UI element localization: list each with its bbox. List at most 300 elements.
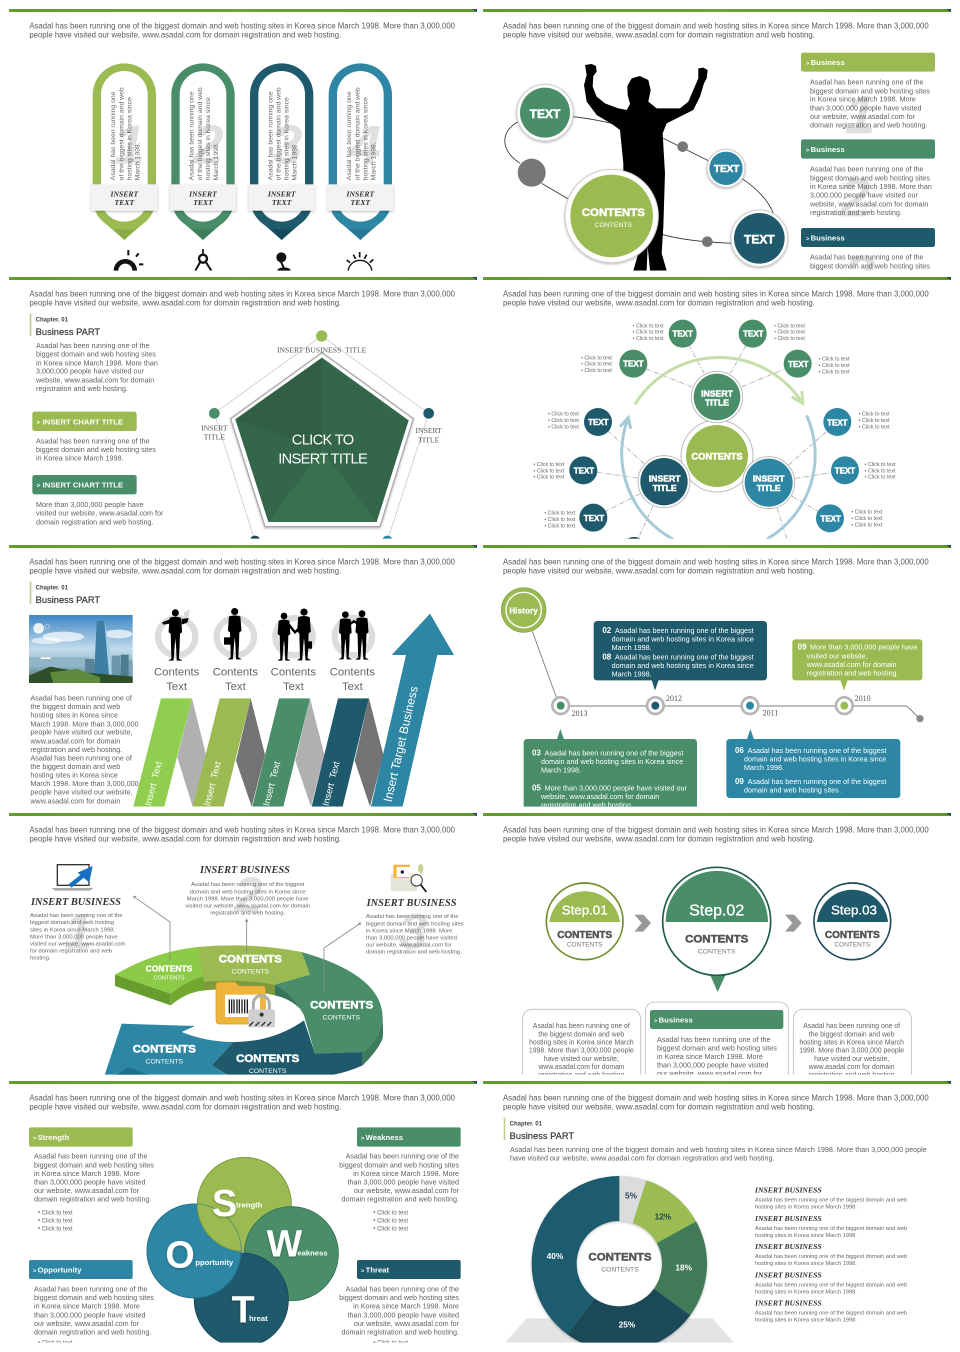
segment: green: CONTENTS	[310, 999, 374, 1011]
pill 4: March 1998.	[370, 142, 377, 180]
intro text: people have visited our website, www.asadal.com for domain registration and web hosting.	[503, 299, 815, 308]
bullet lists: • Click to text	[774, 323, 805, 329]
big arrow	[371, 614, 454, 807]
chart title bar 2: INSERT CHART TITLE	[43, 481, 123, 490]
pill 3: March 1998.	[292, 142, 299, 180]
callout 2011: March 1998.	[744, 763, 784, 772]
icon: laptop with arrow	[52, 865, 93, 891]
node labels: TEXT	[623, 360, 644, 369]
card left: www.asadal.com for domain	[537, 1064, 624, 1071]
card right: have visited our website,	[814, 1056, 889, 1063]
intro text: Asadal has been running one of the biggest domain and web hosting sites in Korea since March 1998. More than 3,000,000	[29, 1093, 456, 1102]
step 3: Step.03	[831, 902, 877, 917]
pill 4	[327, 63, 393, 240]
segment: lime: CONTENTS	[232, 969, 270, 976]
hub: insert title dark: TITLE	[653, 483, 677, 493]
body text: website, www.asadal.com for domain	[35, 375, 154, 384]
intro text: Asadal has been running one of the biggest domain and web hosting sites in Korea since March 1998. More than 3,000,000	[503, 557, 929, 566]
side block 2: 2	[839, 167, 871, 229]
callout 2013: March 1998.	[541, 766, 581, 775]
callout 2012: Asadal has been running one of the biggest	[615, 626, 754, 635]
block: threat: in Korea since March 1998. More	[353, 1302, 459, 1311]
legend 4: hosting sites in Korea since March 1998.	[755, 1290, 857, 1296]
body: left: Asadal has been running one of the	[30, 913, 123, 919]
node labels: INSERT	[415, 426, 442, 435]
bullet lists: • Click to text	[581, 362, 612, 368]
card left: hosting sites in Korea since March	[529, 1040, 634, 1047]
donut labels: 12%	[655, 1211, 672, 1221]
card right: the biggest domain and web	[809, 1031, 895, 1038]
chevron 1	[634, 915, 651, 932]
body text: biggest domain and web hosting sites	[36, 445, 156, 454]
body text: hosting sites in Korea since	[30, 711, 118, 720]
bullet lists: • Click to text	[774, 336, 805, 342]
bullet lists: • Click to text	[774, 330, 805, 336]
callout 2012: March 1998.	[612, 643, 652, 652]
block: opportunity: domain registration and web hosting.	[34, 1328, 151, 1337]
pentagon	[231, 353, 413, 527]
pill 2: INSERT	[188, 189, 217, 198]
intro text: people have visited our website, www.asadal.com for domain registration and web hosting.	[503, 835, 815, 844]
side block 2: in Korea since March 1998. More than	[810, 182, 932, 191]
body text: visited our website, www.asadal.com for	[36, 509, 164, 518]
body: centre: visited our website, www.asadal.com for domain	[185, 904, 310, 910]
segment: lime bright	[115, 947, 204, 994]
donut labels: 5%	[625, 1190, 638, 1200]
pill 4: INSERT	[345, 189, 374, 198]
block: strength: Asadal has been running one of the	[34, 1152, 147, 1161]
bullet lists: • Click to text	[851, 522, 883, 528]
pill 1: INSERT	[109, 189, 138, 198]
block: weakness: our website, www.asadal.com for	[354, 1186, 460, 1195]
circle: text blue	[707, 149, 745, 187]
card middle: our website, www.asadal.com for	[657, 1069, 763, 1078]
hub: contents: CONTENTS	[691, 452, 743, 462]
pill 2: March 1998.	[213, 142, 220, 180]
block: opportunity: in Korea since March 1998. More	[34, 1302, 140, 1311]
intro text: people have visited our website, www.asadal.com for domain registration and web hosting.	[503, 567, 815, 576]
block: weakness	[339, 1127, 461, 1233]
block: weakness: than 3,000,000 people have visited	[347, 1177, 459, 1186]
callout 2011	[726, 729, 900, 798]
nodes	[209, 330, 434, 546]
pill 1	[91, 63, 157, 240]
circle: contents: CONTENTS	[595, 222, 633, 229]
callout 2010	[792, 639, 922, 691]
card middle: Asadal has been running one of the	[657, 1035, 770, 1044]
block: strength: • Click to text	[38, 1211, 73, 1217]
callout 2010: More than 3,000,000 people have	[810, 643, 917, 652]
icon: folder with padlock	[216, 982, 275, 1027]
body: centre: March 1998. More than 3,000,000 people have	[187, 896, 309, 902]
block: opportunity: than 3,000,000 people have visited	[34, 1310, 145, 1319]
bullet lists: • Click to text	[544, 523, 576, 529]
callout 2011: 09	[735, 777, 744, 786]
side block 1: Asadal has been running one of the	[810, 78, 923, 87]
connector lines	[505, 117, 774, 243]
panel: pentagon	[9, 277, 477, 546]
bullet lists: • Click to text	[548, 412, 579, 418]
callout 2010: www.asadal.com for domain	[806, 660, 897, 669]
body text: in Korea since March 1998. More than	[36, 358, 158, 367]
legend 2	[754, 1214, 907, 1239]
block: weakness: • Click to text	[373, 1211, 408, 1217]
circle: contents	[565, 169, 658, 263]
body text: have visited our website, www.asadal.com for domain registration and web hosting.	[510, 1154, 774, 1163]
block: strength: >	[33, 1136, 37, 1142]
intro text: Asadal has been running one of the biggest domain and web hosting sites in Korea since March 1998. More than 3,000,000	[503, 289, 929, 298]
ghost numbers	[64, 867, 427, 960]
card left: Asadal has been running one of	[533, 1023, 630, 1030]
callout 2012: domain and web hosting sites in Korea since	[612, 635, 754, 644]
grey node	[518, 141, 713, 247]
ribbon 3	[252, 698, 310, 807]
pill 2: TEXT	[193, 198, 213, 207]
leader arrows	[133, 896, 361, 992]
body text: More than 3,000,000 people have	[36, 500, 143, 509]
pill 3: INSERT	[267, 189, 296, 198]
bullet lists: • Click to text	[851, 510, 883, 516]
bullet lists: • Click to text	[865, 475, 896, 481]
intro text: people have visited our website, www.asadal.com for domain registration and web hosting.	[29, 1103, 341, 1112]
side block 1: our website, www.asadal.com for	[810, 112, 916, 121]
card left: have visited our website,	[544, 1056, 619, 1063]
marker 2010: 2010	[855, 694, 871, 703]
block: opportunity: >	[33, 1269, 37, 1275]
SWOT label W	[267, 1223, 328, 1265]
side block 3: >	[806, 236, 810, 242]
body: centre: Asadal has been running one of the biggest	[191, 882, 305, 888]
donut centre	[588, 1251, 652, 1274]
block: weakness: Weakness	[366, 1133, 403, 1142]
side block 2: 3,000,000 people have visited our	[810, 191, 918, 200]
legend 5: INSERT BUSINESS	[754, 1298, 822, 1307]
legend 2: Asadal has been running one of the biggest domain and web	[755, 1226, 907, 1232]
marker 2013	[552, 697, 588, 718]
pill 1: of the biggest domain and web	[118, 87, 125, 180]
legend 1	[754, 1186, 907, 1211]
outer guide polygon	[214, 336, 429, 541]
pill 4: hosting sites in Korea since	[362, 97, 369, 180]
callout 2012: March 1998.	[612, 670, 652, 679]
pill 1: Asadal has been running one	[110, 91, 117, 180]
connectors	[583, 334, 845, 553]
top rule	[9, 813, 477, 816]
block: weakness: biggest domain and web hosting sites	[339, 1160, 459, 1169]
circle: text dark: TEXT	[744, 232, 775, 246]
panel: business people ribbons	[9, 545, 477, 807]
SWOT label W: W	[267, 1223, 303, 1265]
pill 3: TEXT	[272, 198, 292, 207]
people captions: Contents	[213, 667, 258, 679]
circle: contents: CONTENTS	[582, 207, 645, 219]
bullet lists: • Click to text	[544, 511, 576, 517]
bullet lists: • Click to text	[851, 516, 883, 522]
ribbon 1: Insert Text	[143, 760, 164, 807]
chapter heading	[30, 582, 100, 605]
block: strength: • Click to text	[38, 1219, 73, 1225]
marker 2010	[836, 694, 871, 714]
callout 2012: Asadal has been running one of the biggest	[615, 652, 754, 661]
card middle: >	[654, 1018, 658, 1024]
node labels: TEXT	[588, 418, 609, 427]
pill 1: 1	[114, 113, 145, 175]
chapter heading: Chapter. 01	[36, 318, 69, 324]
card right	[793, 1009, 911, 1096]
ribbon 4: Insert Text	[321, 760, 342, 807]
block: threat	[339, 1260, 461, 1347]
step 3: CONTENTS	[825, 930, 880, 941]
hub: insert title green: TITLE	[705, 398, 729, 408]
side block 2: website, www.asadal.com for domain	[809, 199, 928, 208]
body text: registration and web hosting.	[30, 745, 122, 754]
marker 2012	[647, 694, 682, 714]
legend 3: Asadal has been running one of the biggest domain and web	[755, 1254, 907, 1260]
body: left: visited our website, www.asadal.com	[30, 941, 126, 947]
top rule	[9, 545, 477, 548]
bullet lists: • Click to text	[533, 462, 565, 468]
callout 2013: Asadal has been running one of the biggest	[545, 748, 683, 757]
step 2: CONTENTS	[698, 948, 736, 955]
nodes: blue	[816, 408, 859, 532]
hub: insert title blue: INSERT	[753, 474, 785, 484]
people captions: Contents	[271, 667, 316, 679]
pill 2: hosting sites in Korea since	[205, 97, 212, 180]
body text: March 1998. More than 3,000,000	[30, 719, 139, 728]
card left: registration and web hosting	[538, 1072, 624, 1079]
side block 2: biggest domain and web hosting sites	[810, 173, 930, 182]
segment: blue arrow	[104, 1024, 233, 1077]
bullet lists: • Click to text	[819, 363, 850, 369]
card right: www.asadal.com for domain	[808, 1064, 895, 1071]
panel: SWOT	[9, 1081, 477, 1347]
block: opportunity	[29, 1260, 154, 1347]
hub: insert title blue	[743, 457, 795, 509]
pill 3: of the biggest domain and web	[276, 87, 283, 180]
bullet lists: • Click to text	[633, 330, 664, 336]
top rule	[9, 9, 477, 12]
side block 2: registration and web hosting.	[810, 208, 902, 217]
pill 4: 4	[349, 113, 381, 175]
icon: sunrise	[346, 252, 374, 271]
chapter heading	[30, 314, 100, 337]
node labels: TEXT	[743, 330, 764, 339]
circle: text dark	[731, 210, 788, 267]
callout 2013: 05	[532, 783, 541, 792]
people 4 with ring	[335, 610, 372, 660]
body text: hosting sites in Korea since	[30, 771, 118, 780]
block: opportunity: our website, www.asadal.com for	[34, 1319, 140, 1328]
block: opportunity: biggest domain and web hosting sites	[34, 1293, 154, 1302]
donut labels: 40%	[547, 1251, 564, 1261]
SWOT label S: trength	[236, 1201, 263, 1210]
card left: 1998. More than 3,000,000 people	[529, 1048, 634, 1055]
body text: Asadal has been running one of the biggest domain and web hosting sites in Korea since March 1998. More than 3,000,000 people	[510, 1145, 927, 1154]
silhouette of man	[584, 64, 708, 271]
intro text: people have visited our website, www.asadal.com for domain registration and web hosting.	[503, 1103, 815, 1112]
intro text: people have visited our website, www.asadal.com for domain registration and web hosting.	[29, 567, 341, 576]
people captions: Text	[283, 681, 305, 693]
intro text: people have visited our website, www.asadal.com for domain registration and web hosting.	[503, 31, 815, 40]
callout 2012: domain and web hosting sites in Korea since	[612, 661, 754, 670]
legend 2: INSERT BUSINESS	[754, 1214, 822, 1223]
bullet lists: • Click to text	[865, 462, 896, 468]
card middle: in Korea since March 1998. More	[657, 1052, 763, 1061]
icon: joystick	[276, 252, 291, 274]
chart title bar 2	[32, 475, 137, 494]
donut	[532, 1176, 707, 1351]
chapter heading	[504, 1118, 574, 1141]
node labels: TITLE	[418, 435, 440, 444]
intro text: people have visited our website, www.asadal.com for domain registration and web hosting.	[29, 299, 341, 308]
top rule	[9, 277, 477, 280]
body: right: domain registration and web hosting.	[366, 949, 462, 955]
pill 3: hosting sites in Korea since	[284, 97, 291, 180]
card middle: Business	[659, 1015, 693, 1024]
bullet lists: • Click to text	[859, 412, 890, 418]
segment: lime	[197, 945, 310, 985]
legend 5: hosting sites in Korea since March 1998.	[755, 1317, 857, 1323]
marker 2013: 2013	[572, 709, 588, 718]
timeline	[561, 703, 907, 708]
intro text: Asadal has been running one of the biggest domain and web hosting sites in Korea since March 1998. More than 3,000,000	[29, 557, 456, 566]
people captions: Contents	[330, 667, 375, 679]
ghost numbers: 3	[399, 904, 427, 960]
body: right: in Korea since March 1998. More	[366, 928, 452, 934]
bullet lists: • Click to text	[533, 468, 565, 474]
block: opportunity: • Click to text	[38, 1341, 73, 1347]
hub: insert title green: INSERT	[701, 388, 734, 398]
side block 1	[801, 52, 935, 134]
bullet lists: • Click to text	[548, 424, 579, 430]
marker 2011: 2011	[763, 709, 778, 718]
bullet lists: • Click to text	[548, 418, 579, 424]
block: weakness: >	[361, 1136, 365, 1142]
body text: Asadal has been running one of the	[36, 437, 149, 446]
arc arrow: green	[635, 357, 803, 404]
callout 2011: domain and web hosting sites in Korea since	[744, 754, 886, 763]
chart title bar 1: INSERT CHART TITLE	[43, 417, 123, 426]
donut centre: CONTENTS	[601, 1267, 639, 1274]
step 3: CONTENTS	[834, 942, 871, 949]
pill 2: 2	[192, 113, 224, 175]
legend 1: INSERT BUSINESS	[754, 1186, 822, 1195]
side block 2: Asadal has been running one of the	[810, 165, 923, 174]
step 2	[663, 867, 771, 992]
segment: blue arrow: CONTENTS	[146, 1058, 184, 1065]
body text: people have visited our website,	[30, 728, 133, 737]
block: weakness: domain registration and web hosting.	[342, 1195, 459, 1204]
legend 3	[754, 1242, 907, 1267]
body: right: Asadal has been running one of the	[366, 914, 459, 920]
callout 2011: 06	[735, 746, 744, 755]
segment: blue arrow: CONTENTS	[133, 1044, 196, 1056]
ghost numbers: 2	[233, 867, 262, 923]
block: threat: than 3,000,000 people have visited	[347, 1310, 459, 1319]
hub: insert title green	[691, 371, 743, 423]
block: weakness: • Click to text	[373, 1227, 408, 1233]
side block 3	[801, 228, 935, 270]
legend 4	[754, 1271, 907, 1296]
body text: in Korea since March 1998.	[36, 454, 123, 463]
block: threat: • Click to text	[373, 1341, 408, 1347]
side block 3: Business	[811, 233, 845, 242]
card right: hosting sites in Korea since March	[799, 1040, 904, 1047]
nodes: dark	[569, 408, 648, 565]
history badge: History	[509, 606, 538, 615]
node labels: TITLE	[204, 433, 225, 442]
step 2: CONTENTS	[685, 933, 749, 945]
callout 2010: registration and web hosting.	[807, 668, 899, 677]
people 3 handshake with ring	[275, 608, 313, 661]
photo: city towers	[29, 615, 133, 683]
pill 1: March 1998.	[134, 142, 141, 180]
body text: 3,000,000 people have visited our	[36, 367, 144, 376]
body text: people have visited our website,	[30, 788, 133, 797]
top rule	[483, 9, 951, 12]
ribbon 2	[193, 698, 251, 807]
SWOT label S	[212, 1182, 263, 1224]
block: weakness: in Korea since March 1998. More	[353, 1169, 459, 1178]
panel: radial diagram	[483, 277, 951, 565]
arc: blue right	[767, 415, 815, 539]
panel: vertical pills	[9, 9, 477, 284]
SWOT circles	[147, 1157, 338, 1347]
body: left: More than 3,000,000 people have	[30, 934, 118, 940]
block: threat: >	[361, 1269, 365, 1275]
circle: text green	[517, 84, 573, 141]
callout 2010: visited our website,	[807, 651, 868, 660]
pill 2: Asadal has been running one	[189, 91, 196, 180]
panel: silhouette with circles	[483, 9, 951, 271]
body: left: biggest domain and web hosting	[30, 920, 114, 926]
side block 1: biggest domain and web hosting sites	[810, 86, 930, 95]
step 1: CONTENTS	[557, 930, 612, 941]
ghost numbers: 1	[64, 904, 92, 960]
body: left: sites in Korea since March 1998.	[30, 927, 115, 933]
body: centre: registration and web hosting.	[210, 911, 285, 917]
person 2 with ring	[217, 608, 254, 659]
bullet lists: • Click to text	[865, 468, 896, 474]
callout 2013: website, www.asadal.com for domain	[540, 792, 659, 801]
block: strength: domain registration and web hosting.	[34, 1195, 151, 1204]
donut labels: 25%	[619, 1319, 636, 1329]
icon: compass	[195, 249, 211, 271]
side block 2	[800, 139, 935, 216]
body: right: biggest domain and web hosting sites	[366, 921, 464, 927]
chapter heading: Chapter. 01	[36, 586, 69, 592]
side block 3: Asadal has been running one of the	[810, 253, 923, 262]
segment: lime bright: CONTENTS	[153, 976, 185, 982]
body: left: hosting.	[30, 955, 51, 961]
callout 2011: domain and web hosting sites .	[744, 786, 843, 795]
segment: dark: CONTENTS	[236, 1053, 300, 1065]
step 1: Step.01	[562, 902, 608, 917]
block: threat: biggest domain and web hosting sites	[339, 1293, 459, 1302]
body text: Asadal has been running one of	[30, 753, 132, 762]
body text: domain registration and web hosting.	[36, 517, 153, 526]
icon: folder with magnifier	[391, 864, 426, 892]
hub: insert title dark: INSERT	[649, 474, 681, 484]
legend 1: Asadal has been running one of the biggest domain and web	[755, 1198, 907, 1204]
big arrow: Insert Target Business	[381, 685, 421, 803]
SWOT label W: eakness	[297, 1248, 328, 1257]
step 3	[814, 883, 891, 960]
chapter heading: Business PART	[36, 595, 100, 605]
body text: the biggest domain and web	[30, 702, 120, 711]
block: strength: biggest domain and web hosting sites	[34, 1160, 154, 1169]
pill 4: Asadal has been running one	[346, 91, 353, 180]
